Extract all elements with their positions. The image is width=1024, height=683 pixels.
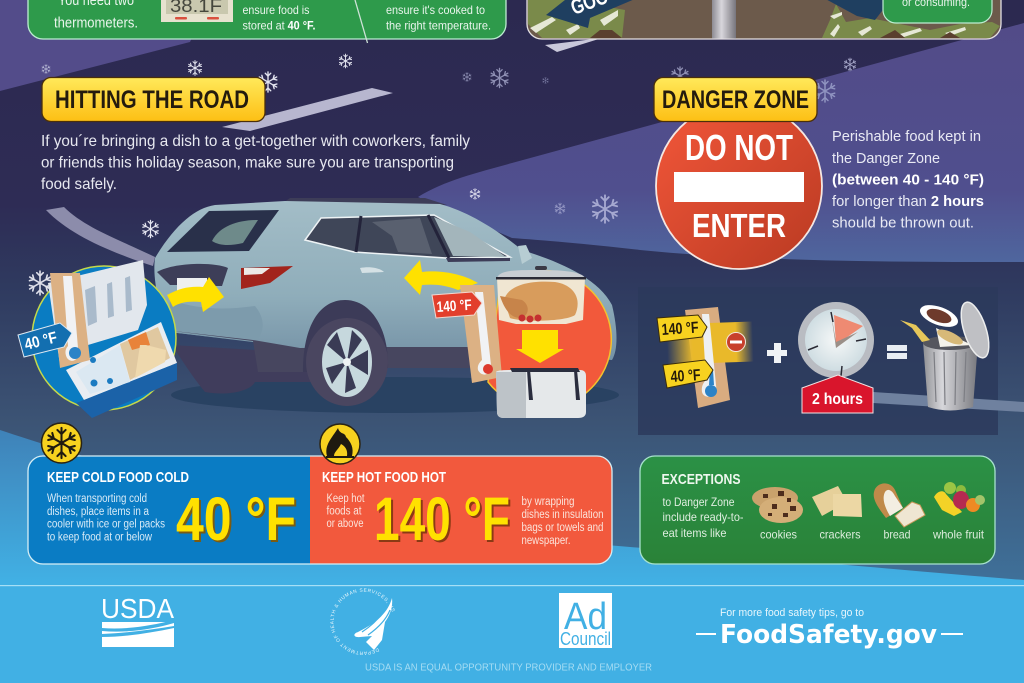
panel: hot: newspaper.: [522, 535, 570, 547]
panel: keep cold food cold and keep hot food hot: [28, 423, 612, 564]
text: you need two thermometers: [54, 0, 138, 32]
icon: thermometer with danger band: [666, 307, 754, 408]
heading: danger zone: DANGER ZONE: [662, 86, 809, 114]
trees: [528, 0, 1000, 38]
thermometer card 140: [460, 285, 502, 383]
text: hitting the road intro: food safely.: [41, 176, 117, 193]
label: 140 F: 140 °F: [661, 319, 699, 339]
labels: exception foods: [760, 528, 985, 542]
panel: cold: to keep food at or below: [47, 532, 153, 544]
car mirror: [518, 245, 532, 264]
illustration: hot food: [404, 260, 611, 418]
cooler body: [66, 322, 177, 400]
logo: USDA: [101, 593, 174, 647]
text: fridge thermometer note: [242, 3, 316, 32]
label: 40 F: 40 °F: [670, 367, 701, 386]
panel: hot: bags or towels and: [522, 522, 604, 534]
panel: cold: KEEP COLD FOOD COLD: [47, 469, 189, 486]
panel: cold: 40 °F: [178, 487, 298, 555]
panel: hot: 140 °F: [376, 487, 512, 555]
text: fridge thermometer note: stored at 40 °F.: [242, 18, 316, 32]
heading: hitting the road: [42, 78, 265, 122]
text: FoodSafety.gov: FoodSafety.gov: [720, 620, 937, 650]
label: 140 F: 140 °F: [436, 297, 472, 316]
text: equal opportunity: USDA IS AN EQUAL OPPORTUNITY PROVIDER AND EMPLOYER: [365, 662, 652, 674]
text: exceptions note: eat items like: [662, 526, 727, 540]
icon: do not enter sign: DO NOT: [685, 127, 793, 168]
snowflakes: [29, 54, 856, 295]
icon: pot with turkey: [496, 266, 586, 324]
label: 40 F: [663, 360, 713, 388]
cooler ice and food: [76, 327, 170, 394]
text: food thermometer note: the right temperature.: [386, 18, 491, 32]
text: hitting the road intro: or friends this holiday season, make sure you are transporting: [41, 154, 454, 172]
panel: hot: KEEP HOT FOOD HOT: [322, 469, 446, 486]
labels: exception foods: bread: [884, 528, 910, 542]
text: danger zone explanation: (between 40 - 140 °F): [832, 172, 984, 188]
thermometer card 40: [50, 273, 90, 368]
text: exceptions note: to Danger Zone: [662, 495, 735, 509]
panel: cold: dishes, place items in a: [47, 506, 150, 518]
text: exceptions note: [662, 495, 744, 540]
car rear underside: [172, 345, 312, 394]
panel: hot: foods at: [326, 506, 362, 518]
text: danger zone explanation: the Danger Zone: [832, 150, 940, 167]
labels: exception foods: whole fruit: [932, 528, 985, 542]
logo: Ad Council: Ad: [564, 596, 607, 638]
plus sign: [767, 343, 787, 363]
car rear trim and plate: [157, 264, 228, 298]
heading: hitting the road: HITTING THE ROAD: [55, 86, 249, 114]
arrow: out of car to pot: [404, 260, 478, 295]
illustration: cooler: [18, 260, 177, 418]
illustration: car: [154, 198, 619, 413]
panel: thermometers: [28, 0, 506, 43]
car rear window: [167, 210, 279, 252]
car front wheel: [303, 300, 388, 406]
icon: do not enter sign: ENTER: [692, 207, 786, 244]
icon: whole fruit: [934, 482, 985, 516]
icon: probe needle: [355, 0, 368, 43]
heading: exceptions: EXCEPTIONS: [662, 471, 740, 488]
text: more food safety tips: For more food safety tips, go to: [720, 607, 864, 619]
panel: exceptions: [640, 456, 995, 564]
sign: good arrow: [546, 0, 642, 28]
icon: trash can with food: [900, 299, 994, 410]
arrow: into car from cooler: [167, 277, 224, 312]
car taillight: [241, 266, 293, 289]
labels: exception foods: crackers: [820, 528, 860, 542]
label: 140 F: [657, 315, 707, 342]
text: you need two thermometers: thermometers.: [54, 16, 138, 32]
text: hitting the road intro: [41, 133, 470, 193]
logo: Ad Council: [559, 593, 612, 649]
car side windows: [305, 215, 510, 262]
logo: HHS: DEPARTMENT OF HEALTH & HUMAN SERVICES, USA: [330, 588, 395, 655]
text: food thermometer note: ensure it's cooked to: [386, 3, 485, 17]
icon: digital thermometer: [161, 0, 233, 22]
logo: USDA: USDA: [101, 593, 174, 624]
text: fridge thermometer note: ensure food is: [242, 3, 310, 17]
icon: snowflake badge: [42, 423, 82, 463]
text: exceptions note: include ready-to-: [662, 510, 744, 524]
panel: cold: cooler with ice or gel packs: [47, 518, 165, 530]
panel: cold: [28, 456, 310, 564]
panel: good and bad sign scene: [527, 0, 1001, 39]
car body shading: [169, 300, 263, 342]
label: 2 hours: [802, 375, 873, 413]
icon: crackers: [812, 486, 862, 517]
panel: cold: When transporting cold: [47, 493, 147, 505]
text: hitting the road intro: If you´re bringing a dish to a get-together with coworkers, family: [41, 133, 470, 150]
car lower trim: [165, 330, 475, 372]
icon: flame badge: [320, 424, 360, 464]
heading: danger zone: [654, 78, 822, 269]
panel: hot: or above: [326, 518, 364, 530]
label: 40 F: [18, 323, 72, 357]
text: food thermometer note: [386, 3, 491, 32]
icon: do not enter sign: [656, 103, 822, 269]
car door handle: [360, 267, 384, 273]
car roof rail: [283, 198, 447, 205]
icon: bread: [874, 483, 925, 527]
text: danger zone explanation: for longer than 2 hours: [832, 193, 984, 210]
panel: hot: [310, 456, 612, 564]
text: danger zone explanation: should be thrown out.: [832, 214, 974, 232]
panel: danger zone equation: [638, 287, 1024, 435]
panel: cold: 40 °F: [176, 485, 296, 553]
arrow: pot to bag: [516, 330, 564, 363]
icon: insulated bag: [496, 368, 586, 418]
sign: bad arrow: [820, 0, 892, 20]
label: 40 F: 40 °F: [23, 329, 59, 354]
panel: hot: Keep hot: [326, 493, 365, 505]
sign pole: [712, 0, 736, 38]
panel: hot: by wrapping: [522, 496, 574, 508]
equals sign: [887, 345, 907, 359]
icon: cookies: [752, 487, 803, 523]
car body: [154, 201, 616, 360]
panel: hot: 140 °F: [374, 485, 510, 553]
text: danger zone explanation: Perishable food kept in: [832, 128, 981, 145]
green note: [883, 0, 992, 23]
logo: Ad Council: Council: [560, 629, 611, 649]
panel: hot: dishes in insulation: [522, 509, 604, 521]
label: 2 hours: 2 hours: [812, 391, 863, 408]
text: danger zone explanation: [832, 128, 984, 232]
icon: clock: [798, 302, 874, 378]
labels: exception foods: cookies: [760, 528, 797, 542]
logo: HHS: [330, 588, 395, 655]
cooler lid: [48, 260, 147, 365]
